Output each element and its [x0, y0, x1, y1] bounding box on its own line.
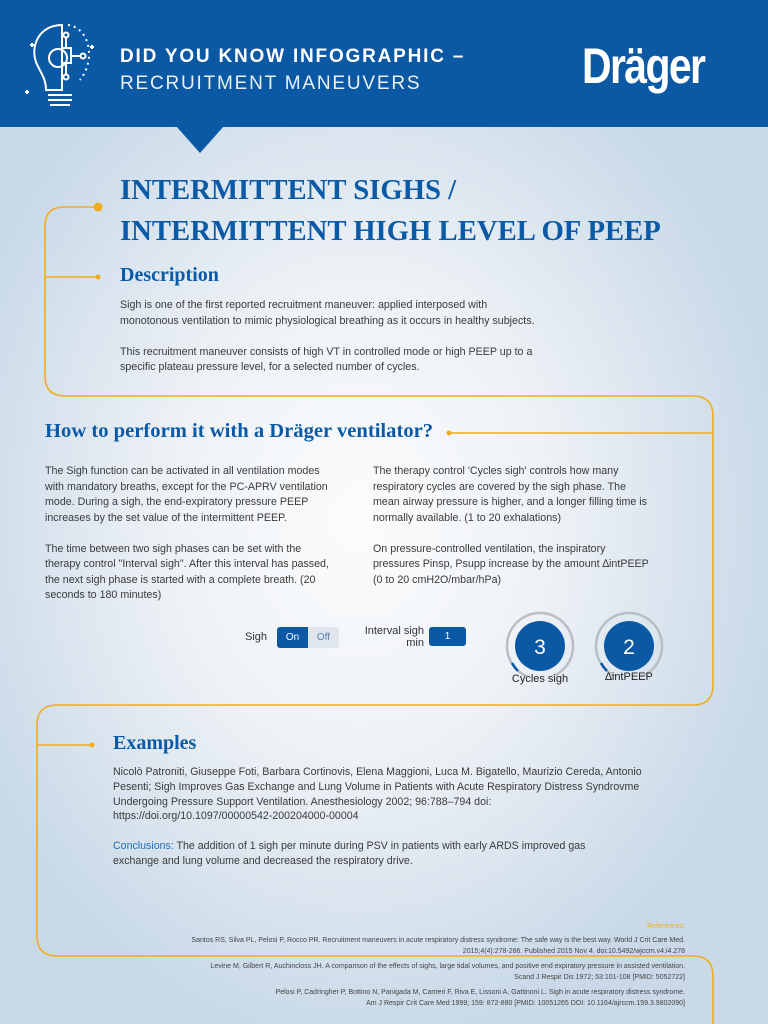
text: left column: mode. During a sigh, the end-expiratory pressure PEEP: [45, 496, 308, 508]
references: Santos RS, Silva PL, Pelosi P, Rocco PR. Recruitment maneuvers in acute respiratory distress syndrome: The safe way is the best way. World J Crit Care Med.: [191, 936, 685, 944]
dial: delta intPEEP: [594, 612, 664, 683]
text: example citation and conclusion: Conclusions: The addition of 1 sigh per minute during PSV in patients with early ARDS improved gas: [113, 840, 585, 852]
text: example citation and conclusion: [113, 766, 642, 867]
references: Scand J Respir Dis 1972; 53:101-108 [PMID: 5052722]: [514, 974, 685, 981]
text: right column: mean airway pressure is higher, and a longer filling time is: [373, 496, 647, 508]
heading: how to perform: How to perform it with a Dräger ventilator?: [45, 420, 433, 442]
references: References:: [647, 923, 685, 930]
text: left column: [45, 465, 329, 601]
text: description: Sigh is one of the first reported recruitment maneuver: applied interposed with: [120, 299, 487, 311]
title: INTERMITTENT SIGHS /: [120, 174, 456, 206]
references: Am J Respir Crit Care Med 1999; 159: 872-880 [PMID: 10051265 DOI: 10.1164/ajrccm.159.3.9802090]: [366, 1000, 685, 1007]
references: [191, 922, 685, 1007]
text: example citation and conclusion: exchange and lung volume and decreased the respiratory drive.: [113, 855, 413, 867]
header pointer: [176, 126, 224, 153]
text: left column: increases by the set value of the intermittent PEEP.: [45, 512, 287, 524]
text: right column: pressures Pinsp, Psupp increase by the amount ∆intPEEP: [373, 558, 649, 570]
control: sigh toggle: Off: [317, 632, 330, 643]
text: example citation and conclusion: Pesenti; Sigh Improves Gas Exchange and Lung Volume in Patients with Acute Respiratory Distress Syndrovme: [113, 781, 639, 793]
header title: [120, 46, 465, 94]
references: Levine M, Gilbert R, Auchincloss JH. A comparison of the effects of sighs, large tidal volumes, and positive end expiratory pressure in assisted ventilation.: [210, 962, 685, 970]
control: interval sigh: [365, 625, 466, 649]
text: left column: The time between two sigh phases can be set with the: [45, 542, 301, 554]
text: left column: The Sigh function can be activated in all ventilation modes: [45, 465, 320, 477]
control: sigh toggle: On: [286, 632, 299, 643]
text: description: monotonous ventilation to mimic physiological breathing as it occurs in healthy subjects.: [120, 314, 535, 326]
text: example citation and conclusion: Nicolò Patroniti, Giuseppe Foti, Barbara Cortinovis, Elena Maggioni, Luca M. Bigatello, Maurizio Cereda, Antonio: [113, 766, 642, 778]
dial: cycles sigh: Cycles sigh: [512, 673, 568, 685]
text: description: [120, 299, 535, 373]
header title: RECRUITMENT MANEUVERS: [120, 73, 421, 94]
logo: Dräger: Dräger: [582, 38, 704, 94]
text: example citation and conclusion: https://doi.org/10.1097/00000542-200204000-00004: [113, 810, 359, 822]
text: left column: the next sigh phase is started with a complete breath. (20: [45, 574, 315, 586]
header title: DID YOU KNOW INFOGRAPHIC –: [120, 46, 465, 67]
text: right column: respiratory cycles are covered by the sigh phase. The: [373, 480, 626, 492]
control: interval sigh: min: [406, 637, 424, 649]
icon: lightbulb: [25, 24, 94, 106]
text: right column: [373, 465, 649, 586]
header bar: [0, 0, 768, 127]
references: 2015;4(4):278-286. Published 2015 Nov 4. doi:10.5492/wjccm.v4.i4.278: [463, 948, 685, 955]
control: interval sigh: 1: [445, 631, 450, 642]
control: sigh toggle: [245, 627, 339, 648]
control: sigh toggle: Sigh: [245, 631, 267, 643]
text: left column: with mandatory breaths, except for the PC-APRV ventilation: [45, 480, 328, 492]
text: description: specific plateau pressure level, for a selected number of cycles.: [120, 361, 420, 373]
dial: delta intPEEP: 2: [623, 636, 635, 659]
text: right column: On pressure-controlled ventilation, the inspiratory: [373, 542, 605, 554]
text: left column: seconds to 180 minutes): [45, 589, 161, 601]
control: interval sigh: Interval sigh: [365, 625, 424, 637]
text: example citation and conclusion: Undergoing Pressure Support Ventilation. Anesthesiology 2002; 96:788–794 doi:: [113, 796, 491, 808]
text: left column: therapy control "Interval sigh". After this interval has passed,: [45, 558, 329, 570]
dial: cycles sigh: [506, 612, 574, 685]
references: Pelosi P, Cadringher P, Bottino N, Panigada M, Carrieri F, Riva E, Lissoni A, Gattinoni L. Sigh in acute respiratory distress syndrome.: [276, 988, 685, 996]
title: [120, 174, 661, 247]
dial: cycles sigh: 3: [534, 636, 546, 659]
text: right column: (0 to 20 cmH2O/mbar/hPa): [373, 574, 501, 586]
title: INTERMITTENT HIGH LEVEL OF PEEP: [120, 215, 661, 247]
heading: Examples: Examples: [113, 732, 196, 754]
text: right column: normally available. (1 to 20 exhalations): [373, 512, 561, 524]
heading: Description: Description: [120, 264, 219, 286]
text: description: This recruitment maneuver consists of high VT in controlled mode or high PEEP up to a: [120, 346, 532, 358]
dial: delta intPEEP: ∆intPEEP: [605, 671, 653, 683]
text: right column: The therapy control 'Cycles sigh' controls how many: [373, 465, 618, 477]
